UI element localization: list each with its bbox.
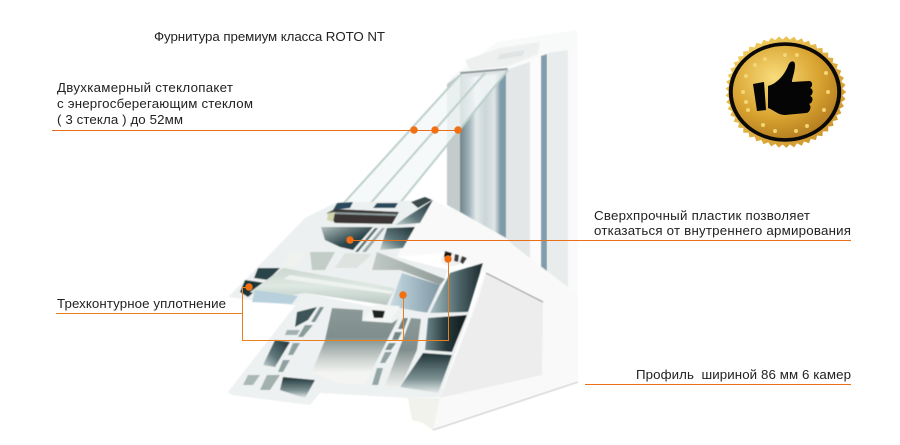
central slab and blue chamber xyxy=(250,252,445,313)
text: ultra strong plastic: Сверхпрочный пластик позволяет xyxy=(594,208,810,223)
badge stars xyxy=(741,53,830,133)
text: double glazing: Двухкамерный стеклопакет xyxy=(57,80,233,95)
text: profile width: Профиль шириной 86 мм 6 камер xyxy=(636,367,851,382)
thumbs-up glyph xyxy=(753,61,813,115)
glass tint between panes xyxy=(343,70,508,204)
leader line: profile width xyxy=(585,384,851,386)
icon: gold thumbs-up badge xyxy=(725,36,846,148)
marker dots: glass panes xyxy=(410,126,462,134)
text: triple seal: Трехконтурное уплотнение xyxy=(57,296,226,311)
glazing spacer xyxy=(327,197,432,224)
bottom sill shadow xyxy=(408,398,440,430)
lower frame body xyxy=(228,293,470,405)
heading: fittings: Фурнитура премиум класса ROTO NT xyxy=(154,29,385,44)
triple glass panes xyxy=(343,70,508,205)
lower frame chambers xyxy=(243,263,483,398)
text: ultra strong plastic: отказаться от внутреннего армирования xyxy=(594,223,851,238)
white sash and frame face base xyxy=(397,200,578,430)
upper sash chambers xyxy=(240,200,433,297)
stippled frame face xyxy=(440,273,543,398)
text: double glazing: ( 3 стекла ) до 52мм xyxy=(57,112,183,127)
leader lines: gasket seals xyxy=(56,255,452,340)
text: ultra strong plastic xyxy=(594,208,851,238)
text: double glazing: с энергосберегающим стеклом xyxy=(57,96,253,111)
leader line: glass to label xyxy=(52,126,462,134)
leader line: plastic to label xyxy=(346,236,851,244)
text: double glazing xyxy=(57,80,253,127)
upper gasket on lower frame xyxy=(441,251,467,266)
sealing gasket xyxy=(363,305,400,322)
upper frame and wall xyxy=(447,30,578,382)
upper sash section base xyxy=(228,200,448,322)
window profile cross-section xyxy=(228,30,578,430)
